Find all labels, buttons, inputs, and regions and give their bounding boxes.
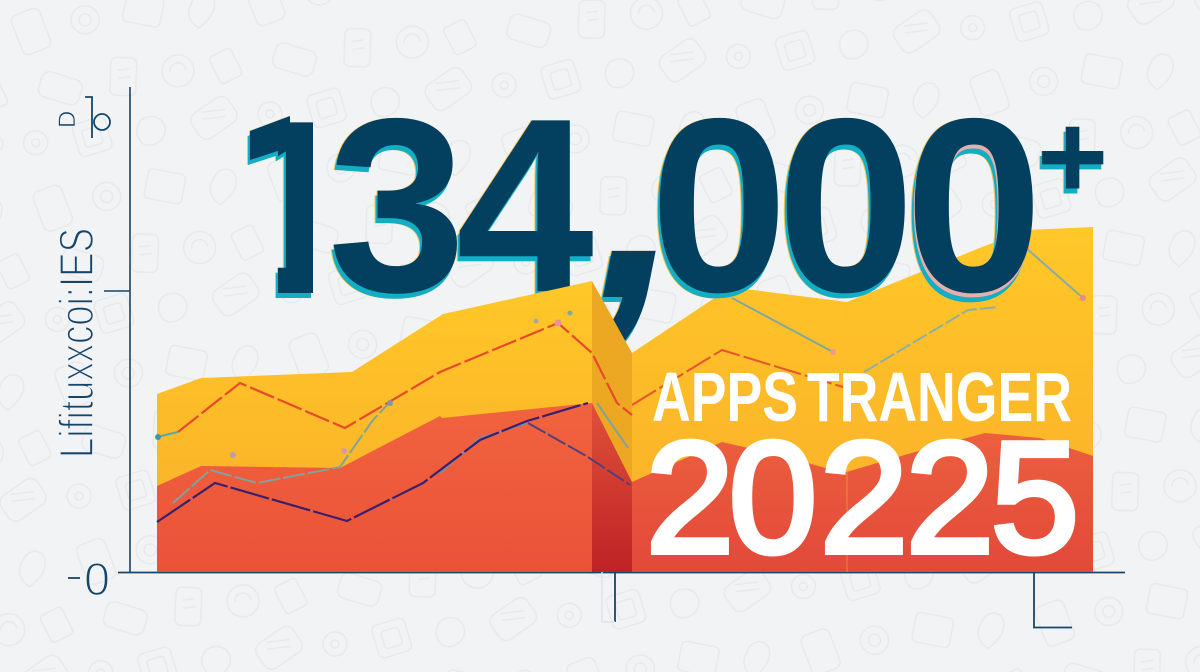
year: 20225: 5 [991,410,1079,586]
big number 134,000+: + [1037,88,1108,224]
y axis top tick label [85,97,110,138]
x axis [118,572,1125,628]
big number 134,000+ [247,116,1104,342]
year: 20225: 2 [646,410,734,586]
y axis top label: D [54,111,81,128]
area chart: left section with centre fold [155,281,632,572]
big number 134,000+: 0 [905,66,1043,344]
y axis zero label [68,553,110,605]
big number 134,000+: 1 [228,68,366,346]
subtitle: APPS TRANGER: APPS TRANGER [652,358,1072,436]
year: 20225: 2 [820,410,908,586]
year: 20225: 2 [906,410,994,586]
big number 134,000+: 4 [456,66,594,344]
year: 20225: 0 [729,410,817,586]
y axis [104,87,130,572]
area chart: right section [632,227,1093,572]
y axis title: Lifituxxcoi:IES [51,228,104,458]
big number 134,000+: 3 [328,66,466,344]
big number 134,000+: 0 [650,66,788,344]
y axis zero label: 0 [84,553,110,605]
big number 134,000+: , [591,16,682,363]
year: 20225 [646,410,1079,586]
big number 134,000+: 0 [777,66,915,344]
